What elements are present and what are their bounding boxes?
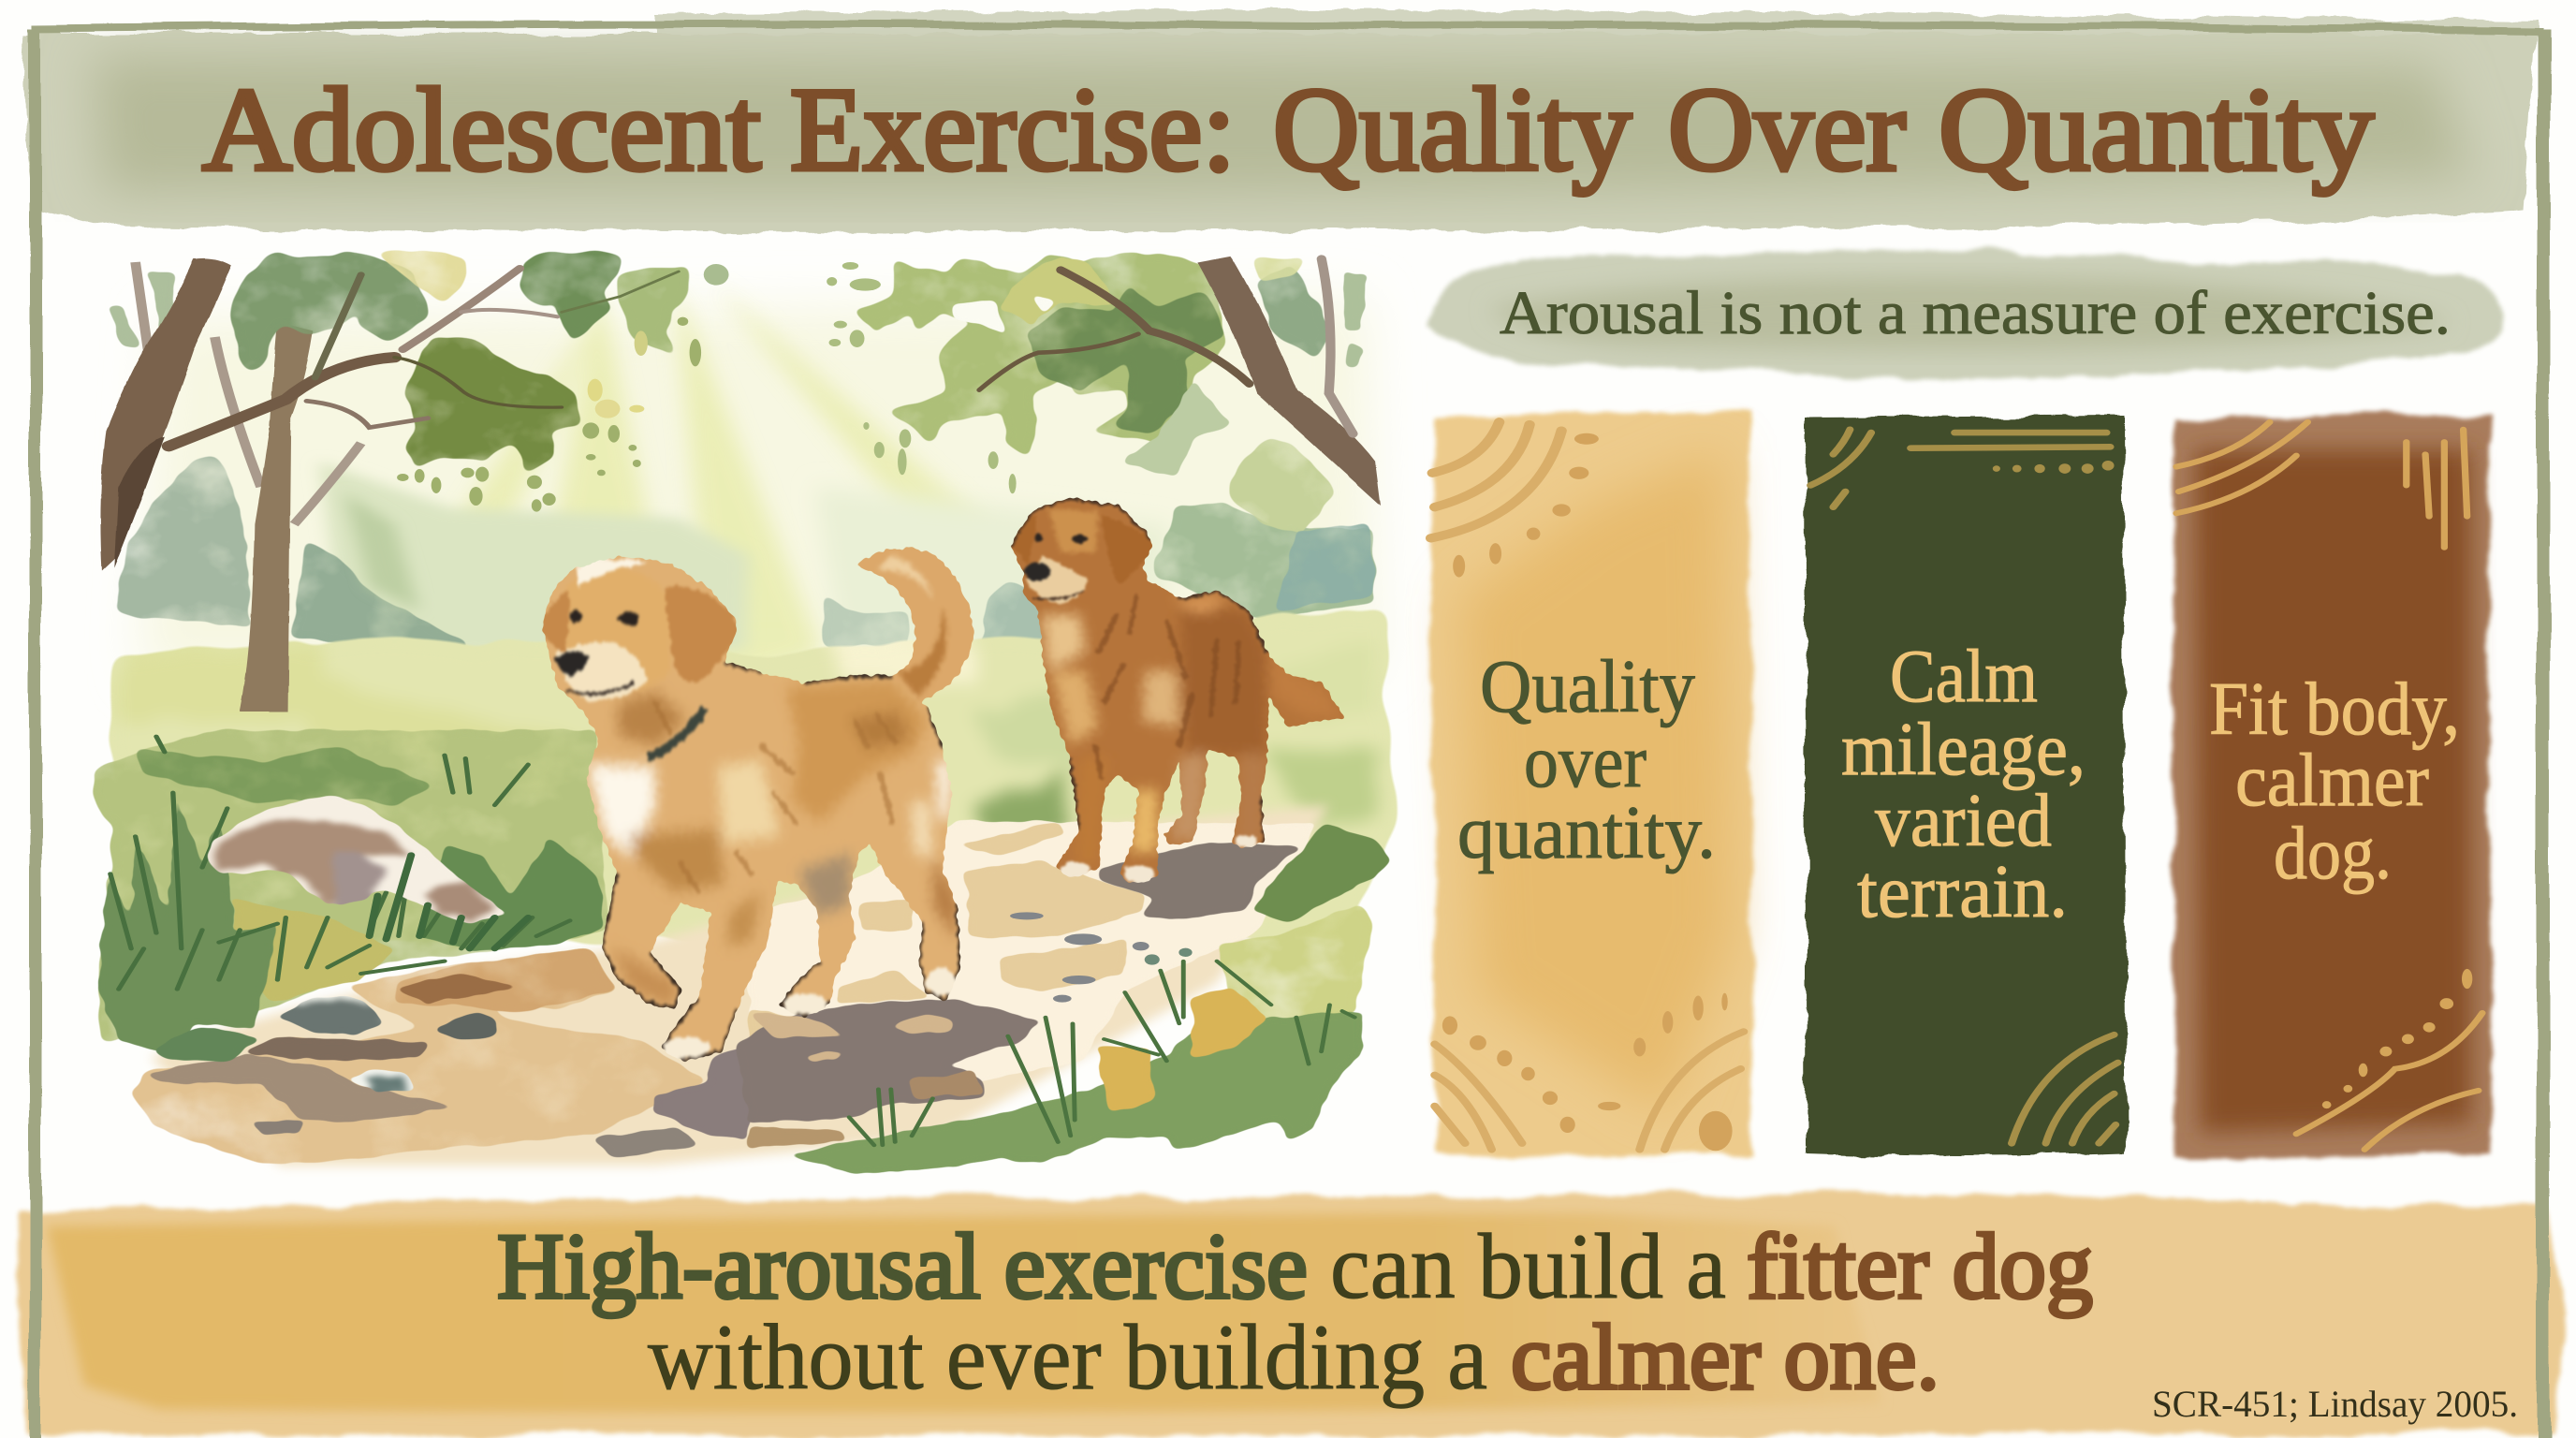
distant trees right: [824, 437, 1375, 646]
front dog face: [564, 565, 671, 691]
branches: [168, 269, 679, 447]
title: Exercise:: [790, 65, 1236, 196]
stones: [253, 996, 699, 1158]
card text: [1457, 646, 1716, 874]
olive leaf cluster: [402, 336, 582, 475]
lower-right trail and grass: [737, 821, 1392, 1173]
conclusion text: without ever building a: [648, 1305, 1487, 1409]
left trees and branches: [100, 250, 729, 712]
front dog mouth: [564, 682, 635, 695]
card text: [2209, 668, 2460, 895]
grassy bank: [94, 730, 607, 1042]
dark main trunk: [100, 258, 231, 571]
card text: dog.: [2274, 813, 2392, 895]
front dog: [542, 547, 974, 1062]
back dog: [1011, 497, 1344, 883]
front dog collar: [648, 708, 705, 756]
card: fit body calmer dog: [2174, 414, 2492, 1157]
mid trunk: [240, 321, 313, 712]
sunlit meadow: [112, 609, 1395, 946]
title: Adolescent: [202, 65, 761, 196]
branches: [979, 259, 1353, 433]
conclusion text: can build a: [1330, 1214, 1726, 1318]
front dog forehead highlight: [578, 560, 649, 587]
loose leaves: [827, 262, 1017, 493]
conclusion text: fitter dog: [1747, 1214, 2093, 1318]
card text: terrain.: [1857, 851, 2068, 933]
yellow canopy: [378, 251, 466, 302]
pale trail: [749, 821, 1317, 1086]
dark canopy: [1027, 284, 1227, 437]
card text: varied: [1875, 780, 2052, 862]
pale leaf cluster: [616, 265, 689, 359]
green meadow bank: [786, 1011, 1363, 1173]
trail wash: [131, 948, 708, 1164]
side leaves: [106, 271, 173, 349]
citation: SCR-451; Lindsay 2005.: [2152, 1383, 2518, 1425]
distant trees left: [117, 456, 749, 658]
front dog tail: [855, 549, 973, 701]
front dog paws and outlines: [602, 663, 959, 1060]
trail base wash: [150, 805, 1329, 1166]
tan patches on shadow: [749, 1011, 983, 1149]
back dog muzzle: [1027, 555, 1087, 604]
card text: Calm: [1890, 636, 2038, 718]
card decoration: [1810, 430, 2118, 1143]
front dog nose: [555, 653, 588, 677]
right trees and branches: [827, 253, 1381, 506]
canopy gaps: [953, 293, 1057, 337]
conclusion text: [497, 1214, 2093, 1409]
bottom conclusion band: [13, 1195, 2567, 1436]
front dog toe highlights: [663, 968, 955, 1058]
upper leaf cluster: [520, 252, 620, 344]
shadow under back dog: [1100, 843, 1300, 920]
back dog coat: [1011, 497, 1344, 883]
title: [202, 65, 2374, 196]
card decoration: [2176, 422, 2482, 1150]
back dog ears: [1013, 515, 1153, 583]
card: calm mileage: [1805, 416, 2127, 1156]
card text: quantity.: [1457, 792, 1716, 874]
back dog mouth and outline: [1011, 499, 1266, 843]
sky and sunlight wash: [140, 281, 1376, 693]
far trunks: [136, 262, 361, 524]
conclusion text: calmer one.: [1511, 1305, 1939, 1409]
title: Quality: [1273, 65, 1632, 196]
shadow under front paw: [653, 1046, 749, 1139]
conclusion text: High-arousal exercise: [497, 1214, 1308, 1318]
clumps of grass: [97, 793, 277, 1055]
card: quality over quantity: [1431, 414, 1752, 1157]
callout band: arousal statement: [1427, 249, 2502, 379]
right trunk: [1197, 256, 1381, 506]
card text: calmer: [2235, 740, 2429, 822]
card text: Quality: [1480, 646, 1695, 728]
card text: [1841, 636, 2086, 933]
pale hanging leaves: [1120, 381, 1231, 477]
shadow under front dog: [737, 999, 1041, 1123]
front dog muzzle: [555, 642, 648, 701]
mossy rock: [207, 796, 511, 924]
card text: over: [1524, 721, 1647, 803]
back dog eyes: [1034, 533, 1088, 543]
grass blades: [849, 961, 1354, 1145]
tall pale grass: [1217, 905, 1373, 1023]
back dog brow: [1048, 508, 1098, 552]
lower-left grass, rock, trail and stones: [94, 730, 749, 1164]
small trail stones: [1010, 912, 1193, 1003]
far right leaves: [1257, 262, 1331, 359]
leafy canopy: [854, 253, 1227, 456]
sandy trail patches: [749, 821, 1146, 1042]
card text: Fit body,: [2209, 668, 2460, 751]
back dog paws: [1061, 835, 1258, 882]
front dog coat: [543, 555, 960, 1062]
yellow canopy: [998, 256, 1116, 325]
golden grass: [1096, 986, 1267, 1111]
front dog ears: [543, 586, 737, 682]
title: Over: [1668, 65, 1906, 196]
front dog eyes: [570, 609, 639, 625]
dark top clump: [1251, 824, 1392, 924]
card decoration: [1431, 422, 1744, 1151]
title: Quantity: [1939, 65, 2374, 196]
back dog nose: [1024, 563, 1050, 581]
illustration: two golden retrievers on a woodland trail: [94, 250, 1395, 1173]
callout text: Arousal is not a measure of exercise.: [1500, 279, 2451, 347]
title band: [23, 10, 2537, 231]
grass at rock foot: [370, 855, 528, 948]
trunk shadow: [114, 437, 165, 568]
card text: mileage,: [1841, 709, 2086, 791]
falling leaves: [397, 264, 729, 512]
leafy canopy top: [231, 250, 432, 372]
